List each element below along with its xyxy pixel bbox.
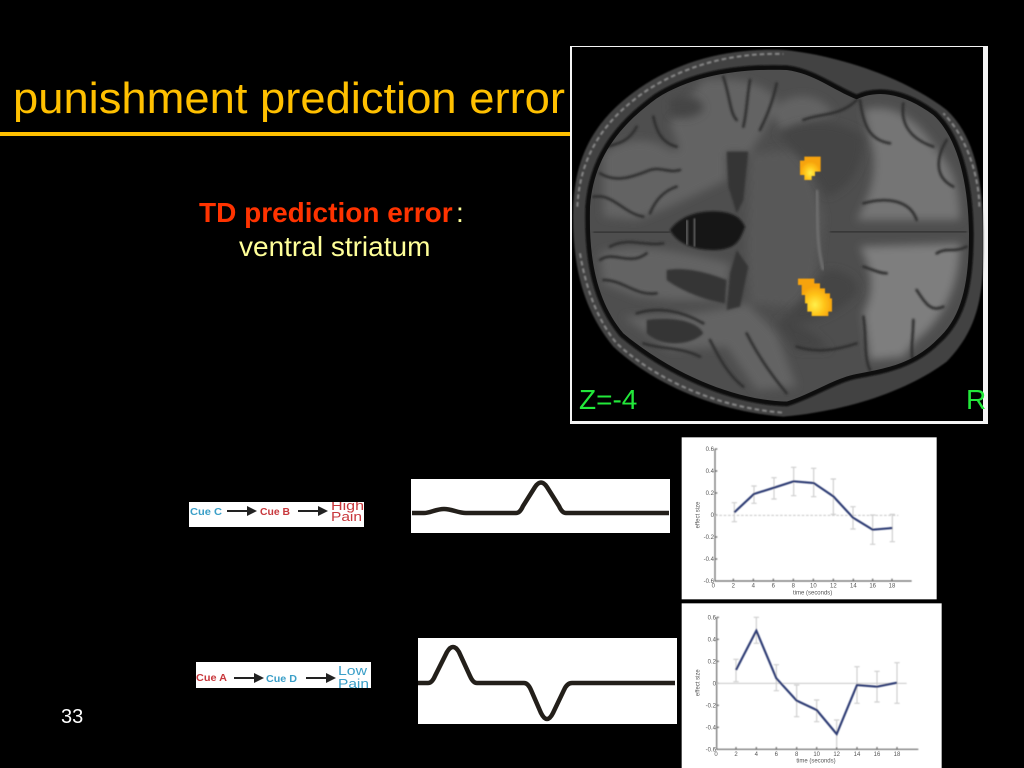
- diagram: high pain cue sequence: High: [331, 499, 364, 513]
- diagram: high pain cue sequence: Pain: [331, 510, 362, 524]
- chart: high pain effect size over time: 14: [850, 584, 857, 590]
- chart: low pain effect size over time: 18: [894, 752, 901, 758]
- chart: low pain effect size over time: 12: [833, 752, 841, 758]
- diagram: low pain cue sequence: Low: [338, 664, 368, 678]
- diagram: high pain cue sequence: [189, 499, 364, 527]
- slide number: 33: [61, 706, 83, 728]
- activation: upper striatum: [800, 157, 821, 180]
- chart: low pain effect size over time: 0.6: [708, 615, 717, 621]
- chart: high pain effect size over time: -0.6: [704, 579, 715, 585]
- diagram: low pain cue sequence: Cue D: [266, 673, 297, 685]
- dark gap: [590, 70, 969, 402]
- chart: low pain effect size over time: 0.4: [708, 637, 717, 643]
- text block: TD prediction error: ventral striatum: [239, 231, 430, 262]
- chart: low pain effect size over time: 6: [775, 752, 779, 758]
- midline fissure: [593, 231, 967, 233]
- chart: high pain effect size over time: 4: [752, 584, 756, 590]
- chart: high pain effect size over time: -0.4: [704, 557, 715, 563]
- chart: high pain effect size over time: 6: [772, 584, 776, 590]
- text block: TD prediction error: :: [456, 197, 464, 228]
- chart: low pain effect size over time: 0: [713, 681, 717, 687]
- chart: high pain prediction error waveform: [411, 479, 670, 533]
- label: R: R: [966, 384, 986, 415]
- chart: low pain effect size over time: [682, 603, 942, 768]
- chart: low pain effect size over time: time (seconds): [796, 759, 836, 765]
- brain tissue: [583, 60, 977, 410]
- chart: low pain effect size over time: 2: [734, 752, 738, 758]
- title: punishment prediction error: [13, 75, 565, 123]
- chart: high pain effect size over time: 10: [810, 584, 817, 590]
- chart: high pain effect size over time: 0.2: [706, 491, 715, 497]
- sulci: [593, 77, 967, 393]
- title underline: [0, 132, 572, 136]
- chart: high pain effect size over time: time (seconds): [793, 590, 832, 596]
- chart: low pain effect size over time: 10: [813, 752, 821, 758]
- activation: lower striatum: [798, 279, 832, 316]
- darker cortex patches: [647, 152, 748, 343]
- text block: TD prediction error: [199, 197, 464, 262]
- chart: high pain effect size over time: 0: [712, 584, 716, 590]
- chart: high pain effect size over time: 8: [792, 584, 796, 590]
- chart: low pain effect size over time: 14: [854, 752, 861, 758]
- chart: low pain effect size over time: 0.2: [708, 659, 717, 665]
- chart: low pain effect size over time: 4: [755, 752, 759, 758]
- grey nuclei: [670, 97, 863, 350]
- chart: low pain prediction error waveform: [418, 638, 677, 724]
- chart: high pain effect size over time: 16: [869, 584, 877, 590]
- skull ring: [573, 50, 983, 417]
- chart: low pain effect size over time: 0: [714, 752, 718, 758]
- chart: high pain effect size over time: 2: [732, 584, 736, 590]
- dark cistern: [670, 211, 745, 250]
- chart: low pain effect size over time: -0.4: [706, 725, 717, 731]
- white matter: [600, 79, 960, 390]
- diagram: high pain cue sequence: Cue C: [190, 506, 222, 518]
- chart: low pain effect size over time: 16: [874, 752, 881, 758]
- chart: high pain effect size over time: 18: [889, 584, 896, 590]
- chart: high pain effect size over time: 0.6: [706, 447, 715, 453]
- text block: TD prediction error: TD prediction error: [199, 197, 453, 228]
- diagram: low pain cue sequence: [196, 662, 371, 691]
- chart: high pain effect size over time: 0.4: [706, 469, 715, 475]
- chart: low pain effect size over time: effect size: [696, 669, 702, 696]
- chart: high pain effect size over time: effect size: [696, 501, 702, 528]
- chart: low pain effect size over time: -0.2: [706, 703, 717, 709]
- chart: high pain effect size over time: 0: [711, 513, 715, 519]
- chart: low pain effect size over time: -0.6: [706, 747, 717, 753]
- panel: brain scan: [570, 46, 988, 424]
- diagram: low pain cue sequence: Pain: [338, 677, 369, 691]
- diagram: high pain cue sequence: Cue B: [260, 506, 290, 518]
- chart: high pain effect size over time: [682, 437, 937, 599]
- chart: high pain effect size over time: 12: [830, 584, 837, 590]
- chart: low pain effect size over time: 8: [795, 752, 799, 758]
- chart: high pain effect size over time: -0.2: [704, 535, 715, 541]
- diagram: low pain cue sequence: Cue A: [196, 672, 227, 684]
- label: Z=-4: Z=-4: [579, 384, 637, 415]
